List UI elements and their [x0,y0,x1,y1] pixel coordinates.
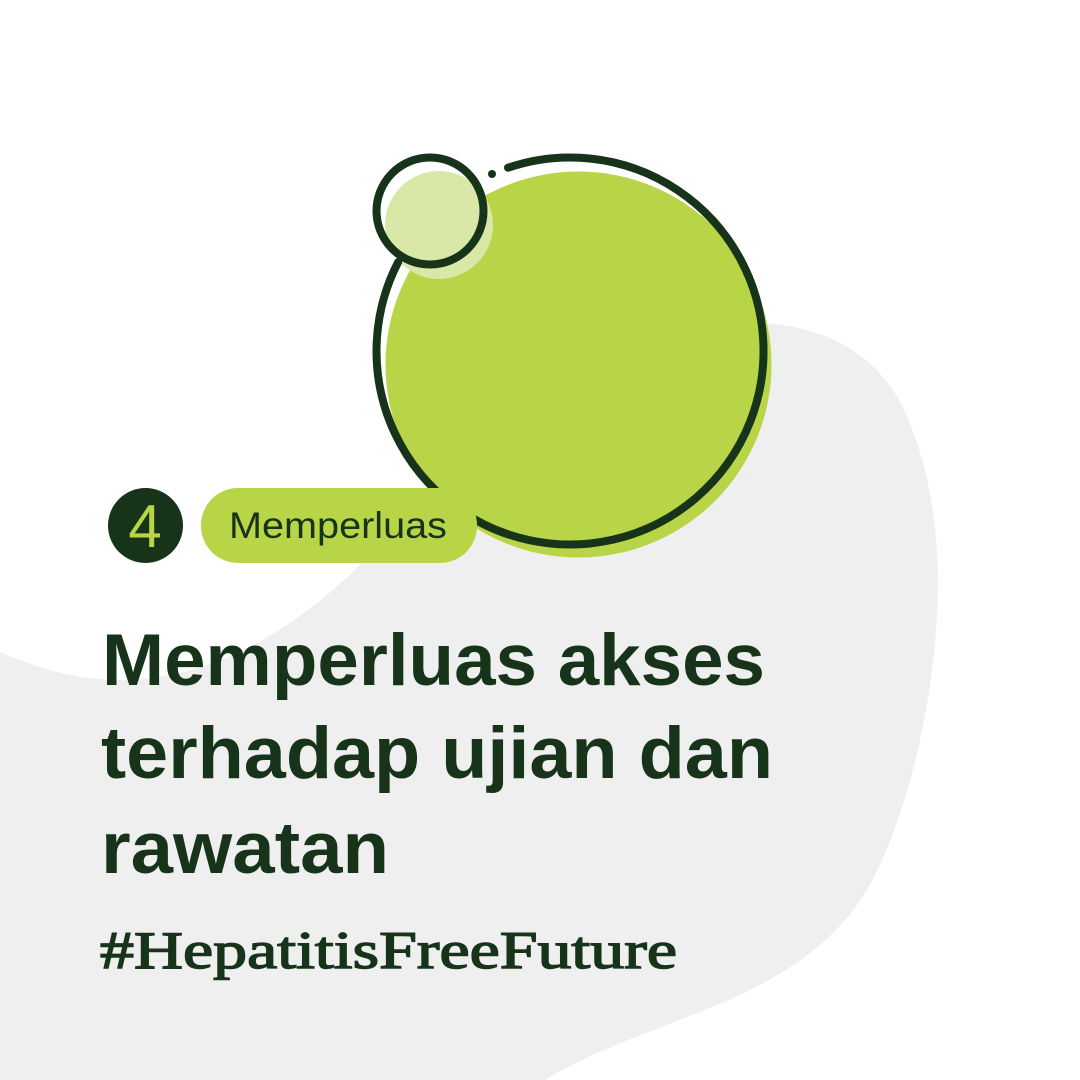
category pill: Memperluas [229,505,447,546]
small ring [376,158,484,264]
green disc [386,172,772,558]
background blob [0,322,938,1080]
icon: large green circle with outline [376,157,772,557]
light green disc [385,171,493,279]
dot [488,170,496,178]
number badge: 4 [128,493,162,560]
category pill [201,488,477,563]
title: terhadap ujian dan [101,713,773,794]
title [101,620,773,889]
title: Memperluas akses [102,620,765,701]
title: rawatan [101,808,389,889]
number badge [108,488,183,563]
hashtag: #HepatitisFreeFuture [100,922,677,980]
dark outline arc [377,157,764,544]
